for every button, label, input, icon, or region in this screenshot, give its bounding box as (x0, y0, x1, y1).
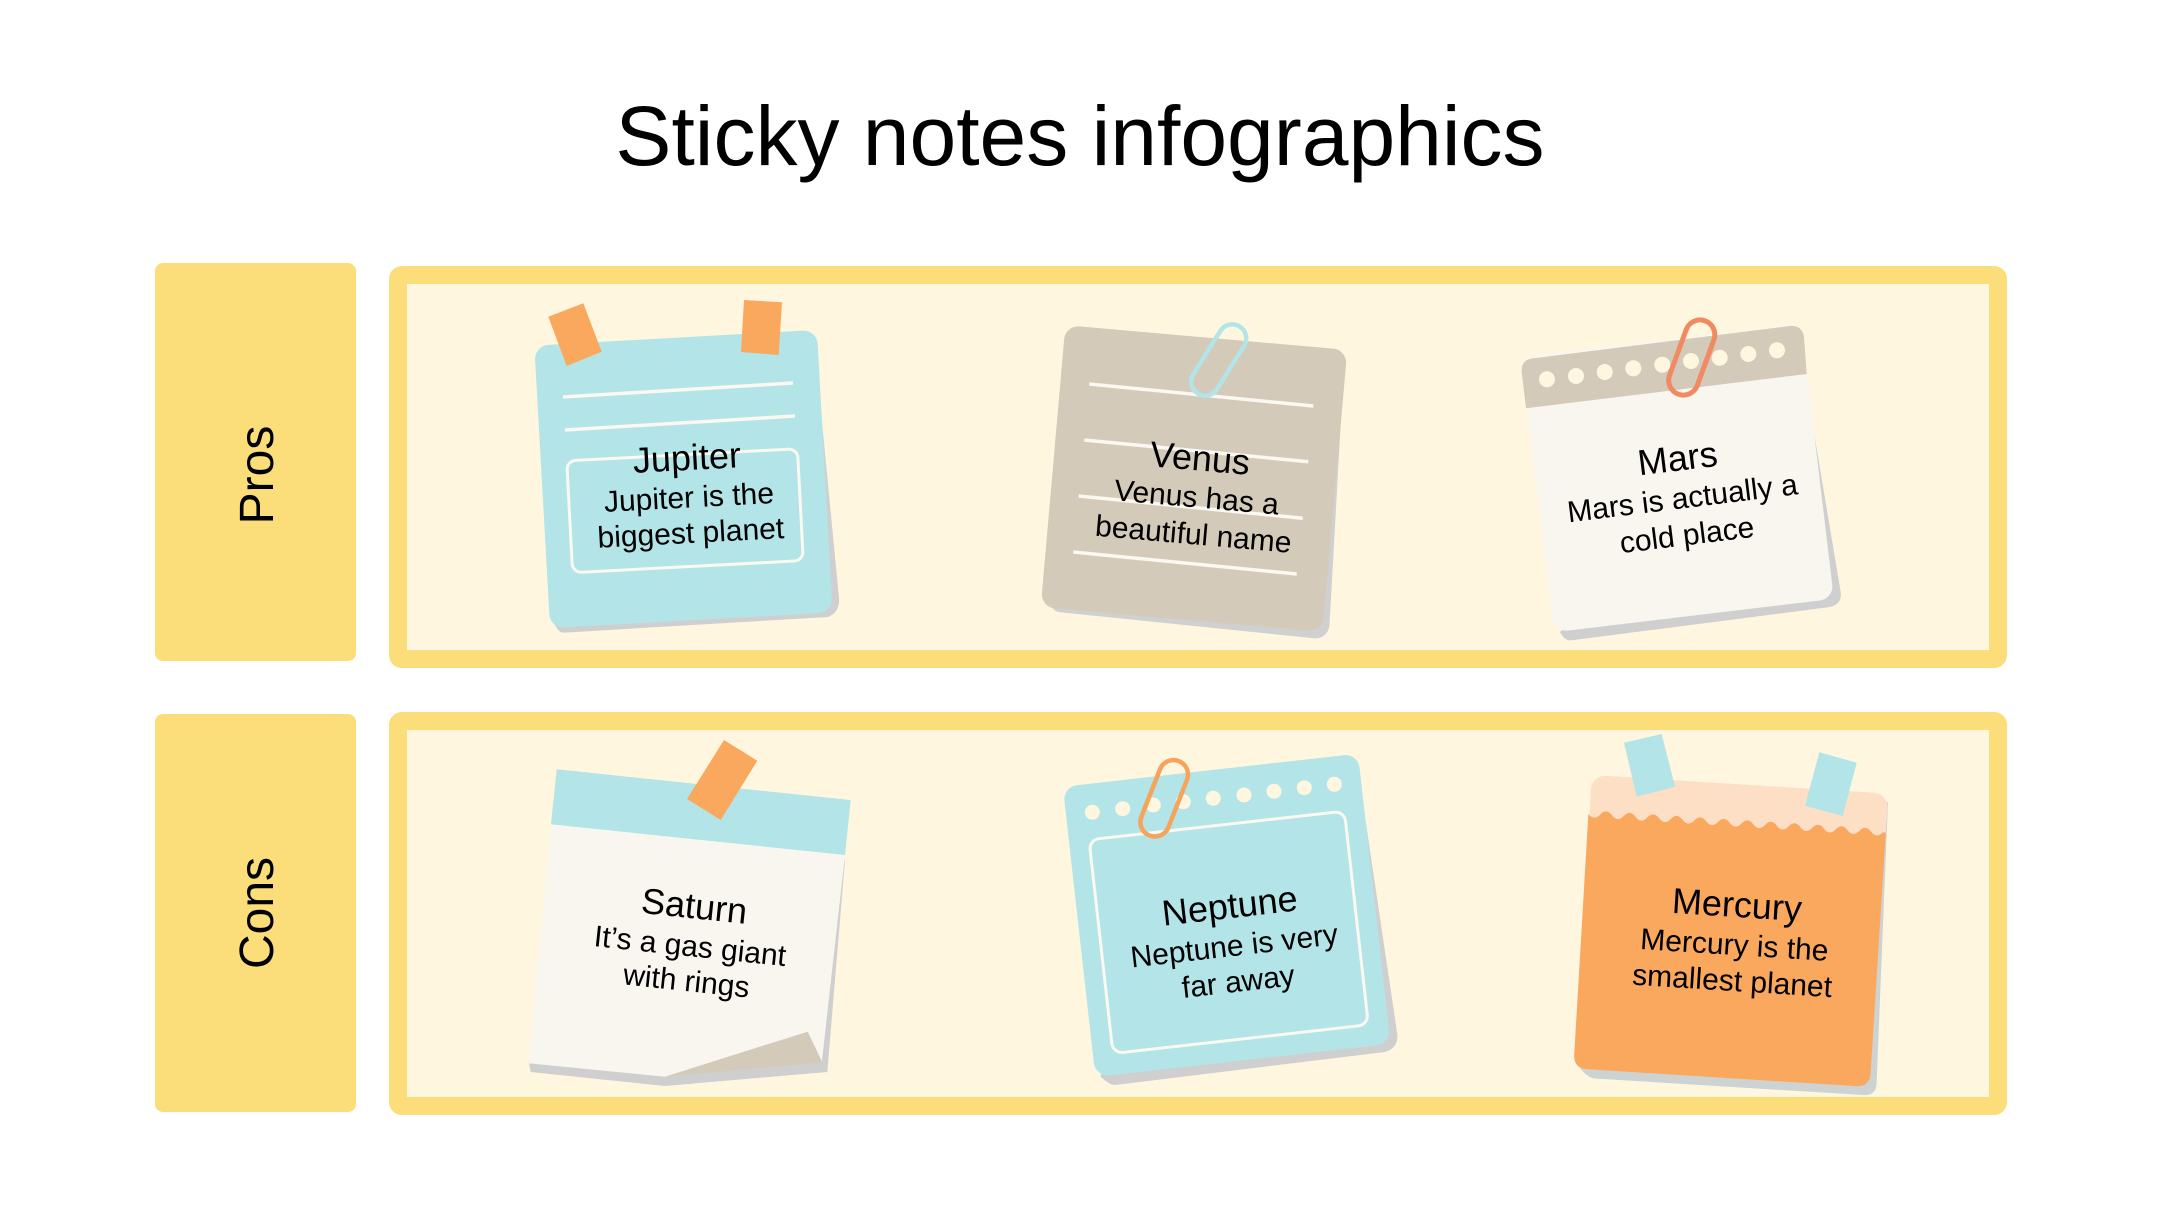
title: Sticky notes infographics (615, 89, 1545, 183)
note: Venus (1041, 319, 1347, 638)
tape right (1805, 752, 1857, 816)
paperclip (1665, 316, 1719, 399)
text: Mercury: Mercury is the (1639, 923, 1829, 968)
text: Mercury: Mercury (1671, 880, 1803, 929)
note fold (665, 1032, 822, 1077)
text: Mars: Mars (1635, 433, 1720, 483)
panel: Pros (398, 275, 1998, 659)
text: Jupiter: biggest planet (597, 512, 786, 555)
paperclip (1136, 756, 1192, 841)
note: Mars (1521, 316, 1841, 640)
text: Saturn: Saturn (639, 880, 749, 932)
label: Pros (155, 263, 356, 661)
tape (687, 740, 757, 820)
tape right (741, 300, 782, 355)
label: Pros: Pros (231, 426, 284, 524)
text: Mars: Mars is actually a (1565, 468, 1800, 529)
text: Saturn (589, 875, 793, 1008)
label: Cons: Cons (231, 857, 284, 969)
note header (551, 769, 851, 855)
note: Jupiter (534, 300, 839, 633)
text: Jupiter: Jupiter is the (603, 477, 775, 519)
note body (528, 824, 845, 1077)
lines (1073, 384, 1313, 574)
tape left (1624, 734, 1675, 797)
text: Venus (1094, 429, 1300, 560)
panel: Cons (398, 721, 1998, 1106)
note: Neptune (1063, 754, 1397, 1085)
text: Mercury (1631, 878, 1839, 1004)
note body (1521, 324, 1834, 632)
text: Jupiter (592, 432, 786, 555)
text: Mars (1560, 424, 1804, 566)
label: Cons (155, 714, 356, 1112)
note: Saturn (528, 740, 851, 1086)
holes (1085, 777, 1342, 820)
paperclip (1186, 319, 1252, 401)
text: Saturn: It’s a gas giant (592, 920, 788, 973)
note header (1522, 326, 1807, 408)
text: Neptune: Neptune is very (1129, 918, 1340, 975)
text: Venus: beautiful name (1094, 510, 1293, 560)
lines (563, 383, 795, 430)
note: Mercury (1572, 734, 1888, 1095)
text: Venus: Venus has a (1113, 474, 1281, 522)
inner frame (567, 449, 803, 573)
tape left (548, 303, 602, 366)
text: Mars: cold place (1618, 511, 1756, 560)
holes (1539, 342, 1785, 387)
text: Neptune: far away (1180, 959, 1297, 1005)
text: Neptune (1124, 873, 1344, 1010)
text: Venus: Venus (1148, 433, 1252, 483)
text: Neptune: Neptune (1160, 878, 1300, 934)
inner frame (1089, 811, 1368, 1053)
text: Saturn: with rings (621, 958, 751, 1004)
note paper (1572, 775, 1888, 1087)
text: Mercury: smallest planet (1631, 959, 1834, 1004)
text: Jupiter: Jupiter (632, 434, 742, 481)
